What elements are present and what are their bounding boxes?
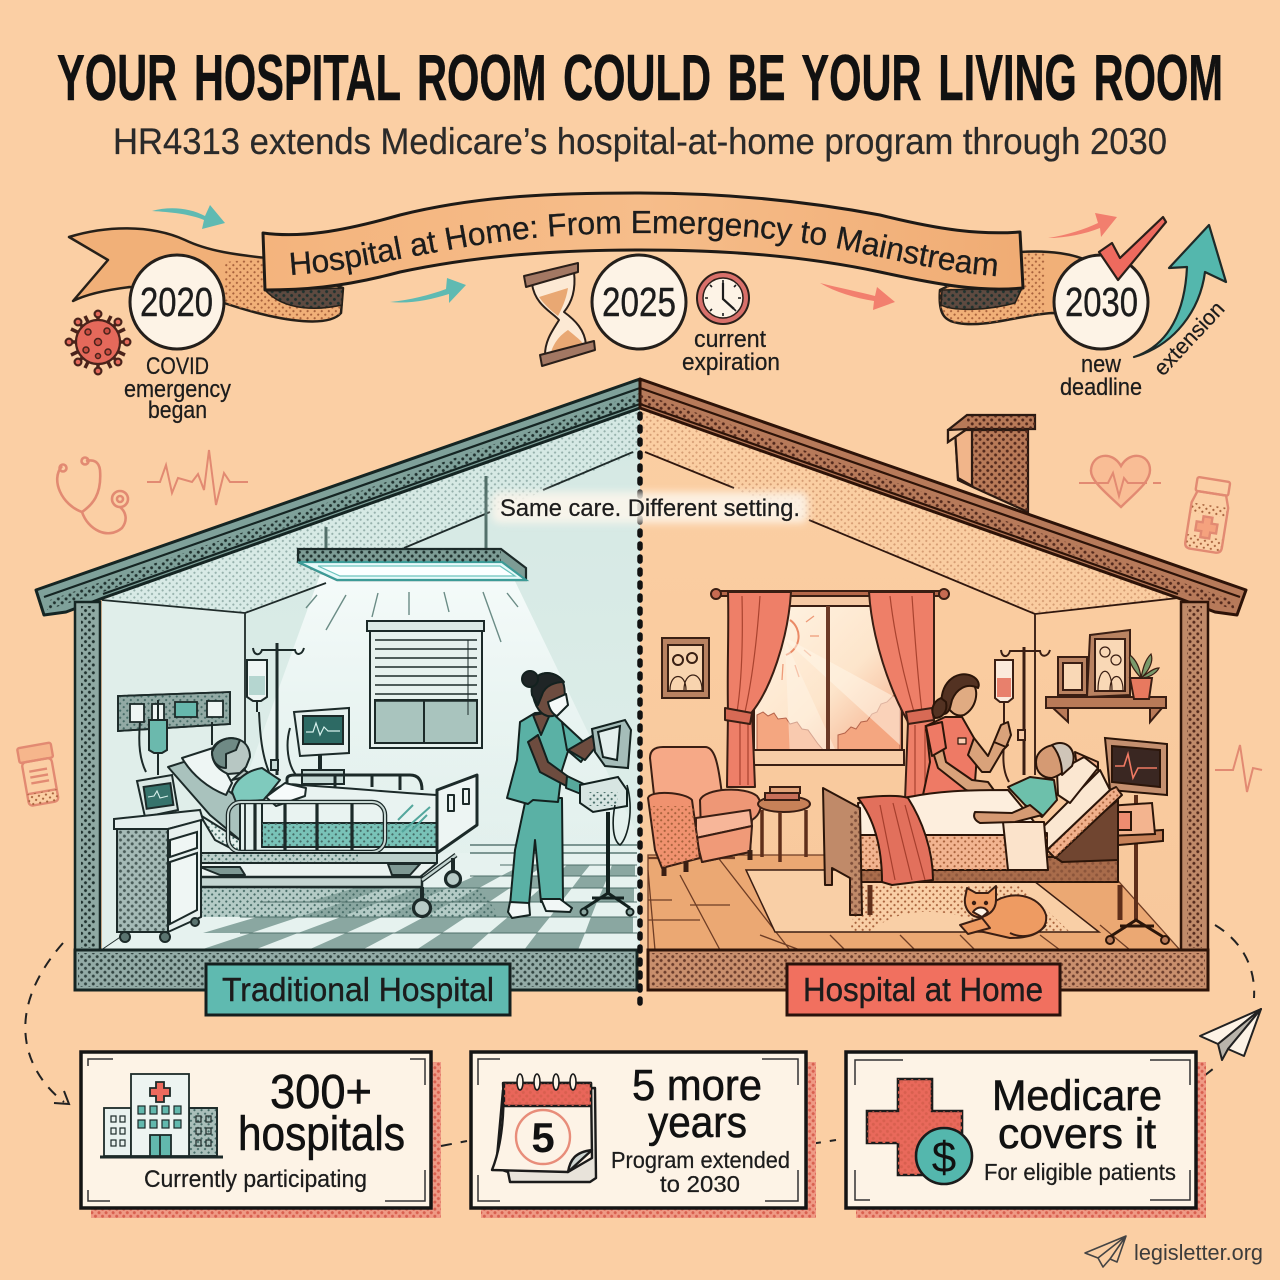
tiled floor [102, 845, 637, 950]
icon: medicine bottle right [1184, 477, 1232, 554]
arrow: extension [1134, 225, 1226, 357]
icon: hourglass [524, 263, 595, 366]
wall panel [118, 692, 230, 731]
label: traditional hospital: Traditional Hospital [222, 971, 494, 1008]
rug [746, 870, 1099, 932]
text: current expiration: expiration [682, 349, 780, 376]
window with sunlight [752, 596, 904, 765]
home bed with patient [823, 743, 1122, 920]
text: new deadline: new [1081, 351, 1122, 378]
icon: calendar [492, 1074, 596, 1182]
footer logo [1085, 1236, 1263, 1267]
icon: logo plane [1085, 1236, 1126, 1267]
house frame [36, 379, 1246, 1015]
arrow: teal under ribbon [390, 278, 466, 303]
left room walls [102, 400, 640, 950]
bedside cabinet with monitor [114, 775, 203, 942]
caption: program extended: Program extended [611, 1147, 790, 1173]
icon: hospital building [100, 1074, 223, 1157]
icon: virus [66, 311, 130, 374]
icon: medical cross with dollar: $ [932, 1133, 956, 1182]
text: current expiration: current [694, 326, 766, 353]
arrow: coral top right [1048, 213, 1117, 238]
left roof [36, 379, 640, 615]
arrow: coral under ribbon [820, 283, 895, 310]
text: COVID emergency began: began [148, 397, 207, 424]
stat: 300+ hospitals: 300+ [270, 1066, 372, 1119]
text: extension: extension [1148, 296, 1229, 380]
milestone: 2020: 2020 [140, 279, 213, 325]
house: left half, traditional hospital [102, 400, 640, 950]
left wall post [75, 602, 100, 950]
cat [960, 886, 1046, 938]
decorative icons [17, 450, 1262, 807]
window with blinds [367, 621, 484, 748]
chimney [948, 415, 1035, 512]
milestone: 2030: 2030 [1065, 279, 1138, 325]
milestone: 2030 [1054, 255, 1148, 349]
armchair [648, 747, 761, 876]
text: legisletter.org: legisletter.org [1134, 1240, 1263, 1265]
milestone: 2025: 2025 [602, 279, 676, 325]
right wall post [1181, 602, 1208, 950]
IV stand with bags [139, 643, 304, 775]
text: COVID emergency began: emergency [124, 376, 231, 403]
nurse in scrubs [507, 671, 611, 918]
stat label: years: years [648, 1098, 747, 1147]
right roof [640, 379, 1246, 615]
stat: medicare: Medicare [992, 1072, 1162, 1120]
dashed connectors [25, 925, 1254, 1146]
subtitle: HR4313 extends Medicare’s hospital-at-home program through 2030 [113, 121, 1167, 162]
text: new deadline: deadline [1060, 374, 1142, 401]
card: 5 more years [471, 1052, 816, 1218]
stat label: hospitals: hospitals [238, 1108, 405, 1161]
milestone: 2025 [592, 255, 686, 349]
icon: ECG left [147, 450, 248, 505]
icon: ECG right [1215, 745, 1262, 792]
ribbon: main banner with heading: Hospital at Home: From Emergency to Mainstream [290, 210, 997, 276]
icon: heart with ECG [1079, 456, 1161, 507]
text: COVID emergency began [124, 353, 231, 424]
callout: same care different setting: Same care. Different setting. [500, 495, 800, 522]
home monitor and cart [1100, 738, 1169, 944]
icon: medical cross with dollar [867, 1079, 972, 1184]
caption: program extended: to 2030 [660, 1171, 740, 1197]
home care nurse [923, 674, 1011, 796]
card: medicare covers it [846, 1052, 1206, 1218]
home IV stand [995, 647, 1050, 782]
patient monitor [288, 708, 349, 784]
icon: clock [697, 272, 749, 324]
timeline [64, 192, 1229, 424]
icon: pill bottle left [17, 743, 61, 807]
caption: currently participating: Currently participating [144, 1166, 367, 1193]
icon: paper plane [1200, 1009, 1261, 1060]
ceiling lamp [298, 476, 526, 642]
center divider [637, 414, 643, 1006]
shelf with photos and plant [1046, 630, 1166, 722]
left foundation [75, 950, 637, 990]
milestone: 2020 [130, 255, 224, 349]
icon: calendar: 5 [531, 1114, 555, 1161]
text: current expiration [682, 326, 780, 376]
side table with books [758, 787, 810, 862]
caption: program extended [611, 1147, 790, 1197]
arrow: teal top left [152, 205, 225, 229]
stat: 5 more: 5 more [632, 1061, 762, 1110]
framed family picture [662, 638, 709, 698]
icon: checkmark [1099, 217, 1166, 280]
card: 300+ hospitals [81, 1052, 441, 1218]
right room walls [640, 400, 1180, 950]
ribbon: left tail [69, 228, 343, 321]
hospital bed with patient [168, 738, 477, 916]
caption: for eligible patients: For eligible patients [984, 1159, 1176, 1185]
right foundation [648, 950, 1208, 990]
curtains [711, 589, 949, 800]
stat label: covers it: covers it [998, 1110, 1156, 1158]
nurse monitor on rolling stand [580, 720, 634, 916]
label: hospital at home: Hospital at Home [803, 971, 1043, 1008]
text: new deadline [1060, 351, 1142, 401]
icon: stethoscope [57, 458, 128, 533]
text: COVID emergency began: COVID [146, 353, 209, 380]
label: hospital at home [787, 964, 1060, 1015]
label: traditional hospital [206, 964, 510, 1015]
house: right half, hospital at home [640, 400, 1180, 950]
ribbon: right tail [940, 251, 1090, 324]
arrow head: connector [54, 1091, 69, 1104]
wooden floor [648, 855, 1180, 950]
